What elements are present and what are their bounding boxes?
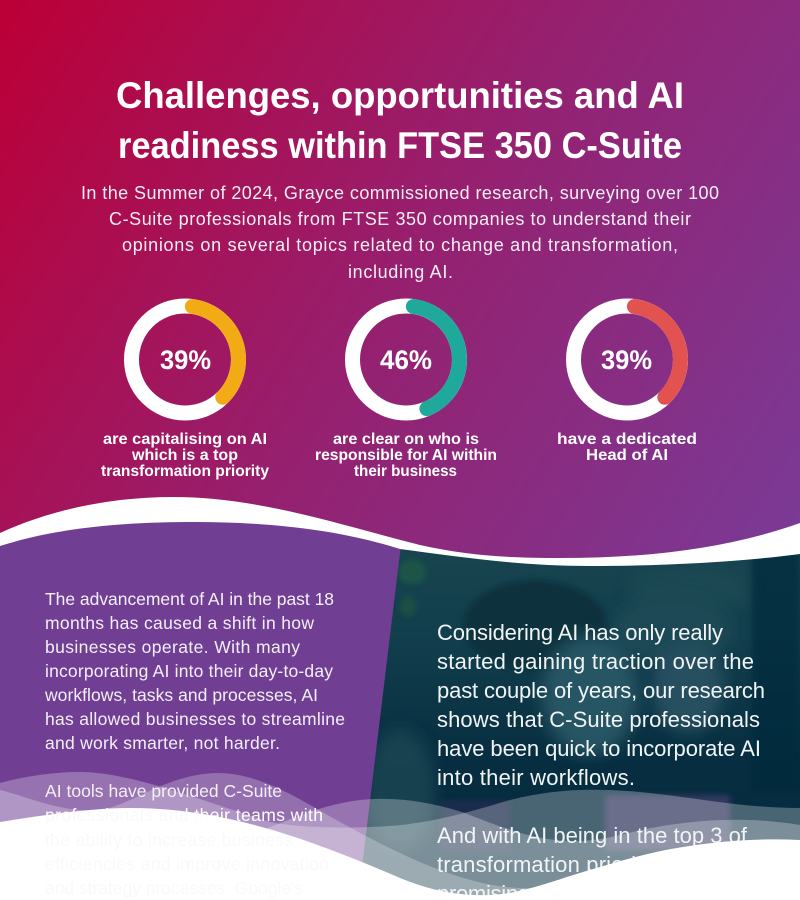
- title: readiness within FTSE 350 C-Suite: [118, 125, 682, 166]
- left body text: businesses operate. With many: [45, 637, 300, 657]
- stat: 46% clear on responsibility: [315, 306, 497, 480]
- purple text panel: [0, 520, 404, 900]
- donut chart: 39%: [132, 306, 238, 413]
- caption: capitalising on AI: are capitalising on AI: [103, 431, 267, 448]
- intro paragraph: [81, 183, 719, 282]
- caption: capitalising on AI: [101, 431, 269, 480]
- value: 39%: 39%: [601, 345, 652, 375]
- caption: Head of AI: [557, 431, 697, 464]
- left body text: months has caused a shift in how: [45, 613, 314, 633]
- translucent wave: back layer one: [0, 772, 800, 900]
- intro paragraph: In the Summer of 2024, Grayce commissioned research, surveying over 100: [81, 183, 719, 203]
- intro paragraph: including AI.: [348, 262, 453, 282]
- right body text: have been quick to incorporate AI: [437, 736, 761, 761]
- stat: 39% dedicated Head of AI: [557, 306, 697, 464]
- intro paragraph: opinions on several topics related to change and transformation,: [122, 235, 678, 255]
- caption: clear on responsibility: responsible for AI within: [315, 447, 497, 464]
- stat: 39% capitalising on AI: [101, 306, 269, 480]
- title: Challenges, opportunities and AI: [116, 75, 684, 116]
- left body text: has allowed businesses to streamline: [45, 709, 345, 729]
- caption: capitalising on AI: transformation priority: [101, 463, 269, 480]
- left body text: AI tools have provided C-Suite: [45, 781, 282, 801]
- translucent wave: back layer three: [250, 799, 800, 900]
- header gradient background: [0, 0, 800, 561]
- left body text: the ability to increase business: [45, 830, 293, 850]
- title: [116, 75, 684, 166]
- right body text: And with AI being in the top 3 of: [437, 823, 748, 848]
- translucent wave: back layer two: [0, 773, 800, 900]
- white bottom wave: [0, 808, 800, 900]
- caption: clear on responsibility: are clear on who is: [333, 431, 479, 448]
- right body text: shows that C-Suite professionals: [437, 707, 760, 732]
- left body text: workflows, tasks and processes, AI: [44, 685, 318, 705]
- right body text: past couple of years, our research: [437, 678, 765, 703]
- left body text: [44, 589, 345, 898]
- donut chart: 39%: [574, 306, 680, 413]
- caption: clear on responsibility: [315, 431, 497, 480]
- right body text: started gaining traction over the: [437, 649, 754, 674]
- right body text: into their workflows.: [437, 765, 635, 790]
- right body text: Considering AI has only really: [437, 620, 723, 645]
- left body text: incorporating AI into their day-to-day: [45, 661, 333, 681]
- caption: Head of AI: have a dedicated: [557, 431, 697, 448]
- left body text: professionals and their teams with: [45, 805, 323, 825]
- caption: Head of AI: Head of AI: [586, 447, 668, 464]
- left body text: efficiencies and improve innovation: [45, 854, 329, 874]
- right body text: [437, 620, 765, 900]
- intro paragraph: C-Suite professionals from FTSE 350 companies to understand their: [109, 209, 691, 229]
- value: 46%: 46%: [380, 345, 432, 375]
- right body text: transformation priorities, there is: [437, 852, 757, 877]
- donut chart: 46%: [352, 306, 460, 413]
- photo panel: smiling colleagues: [362, 549, 800, 896]
- value: 39%: 39%: [160, 345, 211, 375]
- left body text: and strategy processes. Google's: [45, 878, 303, 898]
- caption: capitalising on AI: which is a top: [131, 447, 238, 464]
- left body text: The advancement of AI in the past 18: [45, 589, 334, 609]
- caption: clear on responsibility: their business: [354, 463, 457, 480]
- left body text: and work smarter, not harder.: [45, 733, 280, 753]
- white top wave divider: [0, 497, 800, 566]
